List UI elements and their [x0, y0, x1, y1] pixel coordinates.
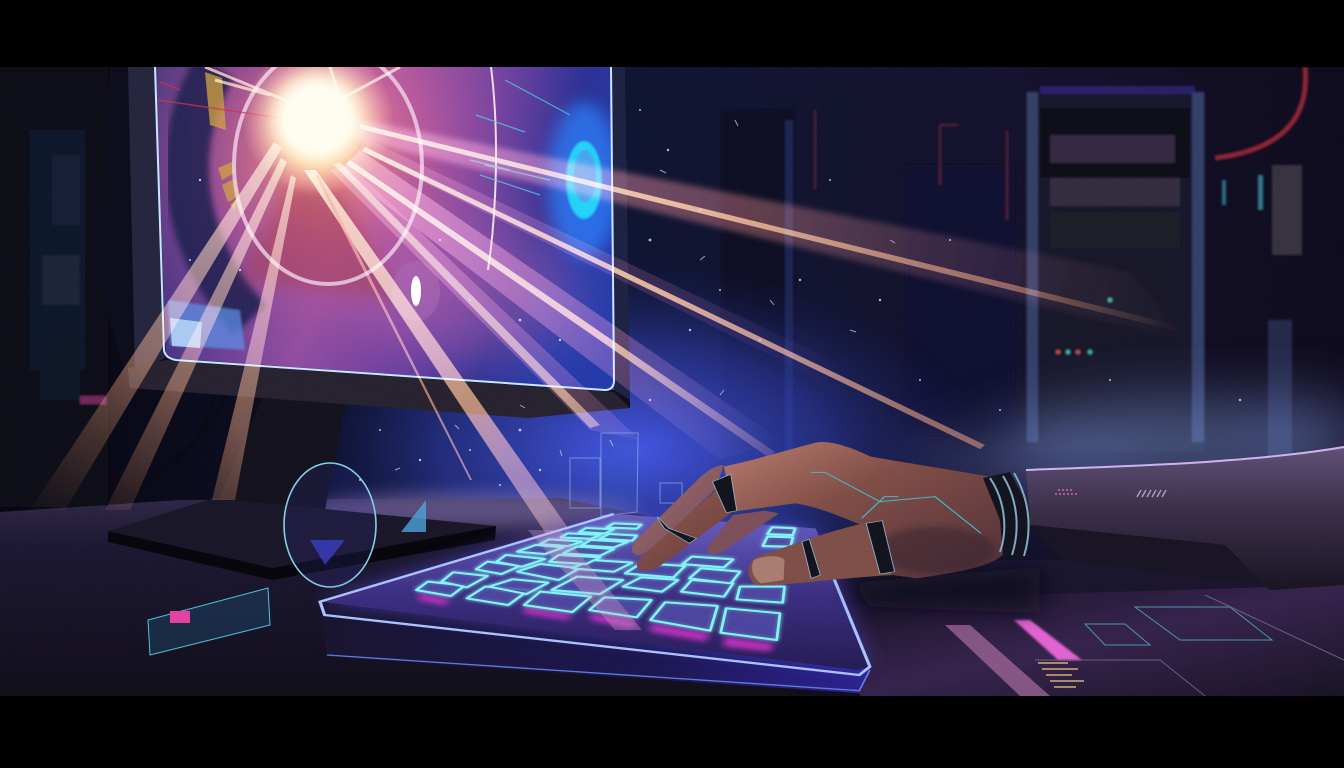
- cyan data streaks: [470, 80, 570, 195]
- key caps: [416, 523, 795, 640]
- cyan circuit lines: [811, 472, 981, 533]
- blue glow behind keyboard: [328, 280, 946, 536]
- keyboard lower rim: [327, 655, 870, 691]
- gold dial segments: [205, 72, 240, 210]
- central background tower: [722, 110, 1015, 460]
- large ring: [234, 46, 422, 284]
- holographic triangles: [310, 500, 426, 565]
- cables behind monitor stand: [105, 395, 225, 505]
- robotic forearm: [1026, 446, 1344, 590]
- room background: [0, 67, 1344, 560]
- lower right pink haze: [360, 220, 580, 360]
- far right equipment and cables: [1215, 67, 1306, 460]
- fog on right: [910, 390, 1344, 490]
- right lower ray: [346, 160, 775, 457]
- thin downward ray: [315, 175, 472, 480]
- monitor bezel: [95, 67, 630, 412]
- left ray two: [105, 158, 287, 510]
- holographic panel left desk: [148, 588, 270, 655]
- blue lower-left panels: [168, 300, 245, 350]
- dark dial arc: [187, 67, 250, 320]
- right upper ray: [360, 124, 1185, 332]
- holographic ring on desk: [284, 463, 376, 587]
- wide light beams: [330, 118, 1190, 460]
- monitor lower edge: [128, 360, 630, 418]
- pale stripe on desk: [945, 625, 1050, 696]
- hand: [632, 442, 1040, 613]
- screen edge highlight: [155, 67, 614, 390]
- desk surface: [0, 498, 1344, 696]
- thumb nail: [752, 556, 785, 583]
- keyboard top: [320, 514, 869, 670]
- top rays: [205, 67, 400, 105]
- left ray three: [212, 175, 296, 500]
- main light ray over keyboard: [528, 530, 642, 630]
- right desk panel: [840, 585, 1344, 696]
- keyboard rim: [320, 514, 870, 675]
- lavender haze at desk edge: [300, 492, 640, 528]
- third finger: [707, 511, 779, 554]
- finger rings: [657, 474, 895, 578]
- monitor left bezel highlight: [128, 67, 165, 372]
- hand shadow on desk: [848, 567, 1040, 613]
- pale data tile: [170, 318, 202, 348]
- monitor stand: [232, 398, 346, 509]
- small HUD bars on right desk: [1038, 662, 1084, 688]
- monitor base: [108, 498, 496, 580]
- monitor screen: [156, 67, 614, 390]
- scattered particles: [189, 109, 1241, 486]
- curved light line: [488, 67, 496, 270]
- monitor right bezel highlight: [611, 67, 630, 400]
- pink stripe on desk: [1014, 620, 1082, 660]
- bright light rays: [30, 67, 1185, 630]
- right middle ray: [362, 147, 985, 449]
- left ray one: [30, 142, 282, 510]
- right server rack: [1025, 90, 1205, 452]
- sun burst: [242, 44, 394, 196]
- keyboard: [320, 514, 871, 693]
- keyboard glow: [320, 517, 866, 667]
- index finger: [637, 464, 797, 571]
- HUD lines on right desk: [1035, 595, 1344, 696]
- thumb: [748, 522, 891, 586]
- palm shading: [875, 527, 995, 573]
- left server rack: [0, 67, 108, 507]
- holographic panels behind keyboard: [570, 433, 682, 516]
- magenta under-key glow: [419, 593, 774, 652]
- main downward ray: [304, 170, 640, 630]
- screen red streaks: [158, 82, 280, 118]
- scratch specks: [395, 120, 895, 470]
- back of hand: [724, 442, 1004, 578]
- white oval: [392, 261, 440, 321]
- keyboard underside: [320, 603, 871, 693]
- blue glowing oval: [548, 102, 620, 258]
- pink glow in screen: [156, 67, 560, 366]
- dark orange core beneath sun: [240, 190, 400, 300]
- pale diagonal ray: [334, 162, 600, 428]
- wrist bracelet: [983, 472, 1035, 560]
- back finger: [632, 465, 724, 555]
